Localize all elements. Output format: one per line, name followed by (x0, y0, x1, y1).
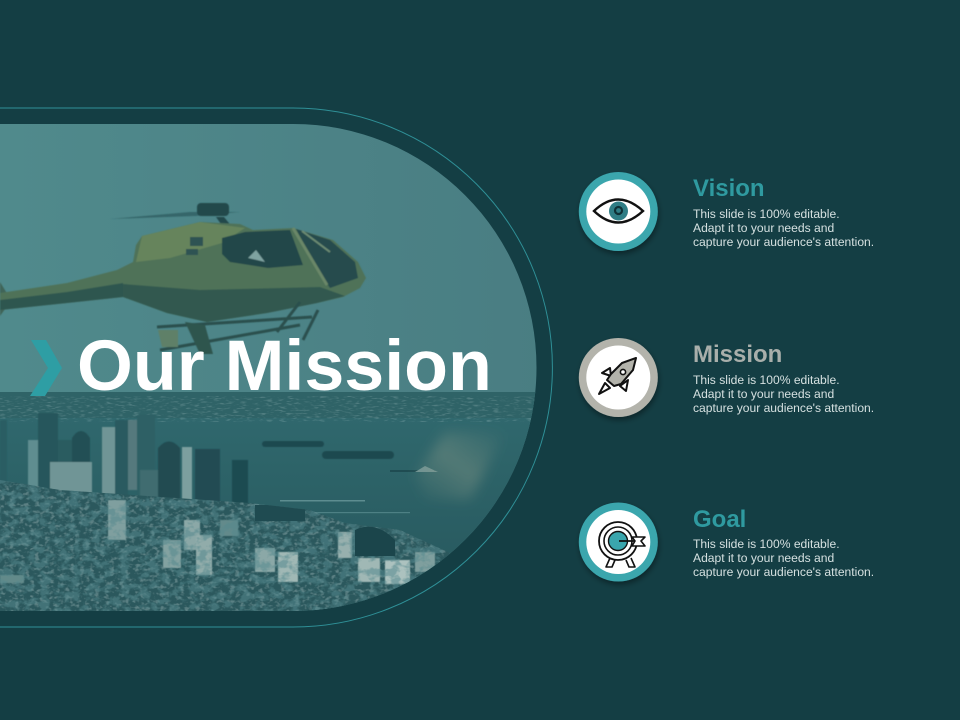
outline frame around photo (0, 108, 552, 627)
item: goal (579, 502, 874, 582)
rotor (110, 212, 240, 219)
tail fin (0, 282, 6, 316)
title text: Our Mission (77, 326, 492, 406)
harbour water (0, 392, 536, 553)
text block: goal: Adapt it to your needs and (693, 551, 834, 565)
city blocks (0, 480, 450, 611)
title (30, 326, 492, 406)
item: mission (579, 338, 874, 417)
tail boom shade (0, 283, 123, 310)
fuselage (0, 222, 366, 300)
helicopter (0, 203, 366, 354)
upper cowl highlight (136, 222, 245, 262)
icon: rocket (579, 338, 658, 417)
item: vision (579, 172, 874, 251)
text block: goal: This slide is 100% editable. (693, 537, 840, 551)
heading: mission: Mission (693, 341, 782, 368)
text block: mission: Adapt it to your needs and (693, 387, 834, 401)
text block: vision: capture your audience's attention. (693, 235, 874, 249)
heading: vision: Vision (693, 175, 765, 202)
text block: mission: This slide is 100% editable. (693, 373, 840, 387)
text block: vision: This slide is 100% editable. (693, 207, 840, 221)
heading: goal: Goal (693, 506, 746, 533)
panel: city and helicopter photo (0, 124, 560, 612)
text block: vision: Adapt it to your needs and (693, 221, 834, 235)
icon: target (579, 502, 658, 582)
chevron (30, 340, 62, 396)
skids (157, 302, 318, 350)
icon: eye (579, 172, 658, 251)
text block: mission: capture your audience's attention. (693, 401, 874, 415)
lower body shade (123, 284, 345, 322)
skyline (0, 412, 248, 503)
text block: goal: capture your audience's attention. (693, 565, 874, 579)
windows (222, 230, 303, 268)
